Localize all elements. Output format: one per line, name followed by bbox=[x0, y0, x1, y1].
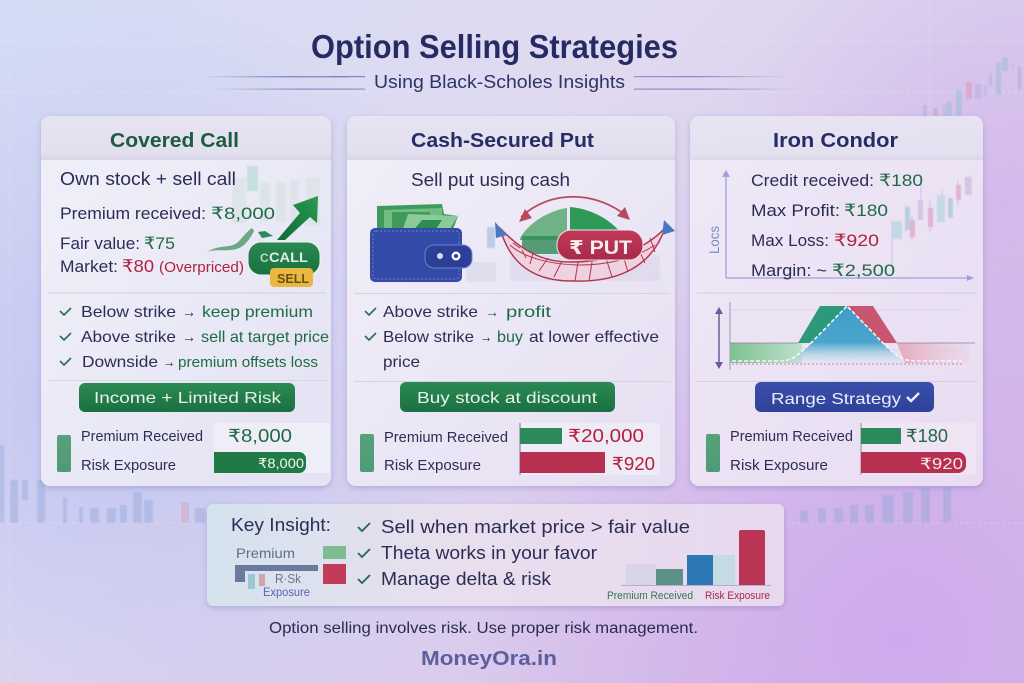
axis with label bbox=[706, 170, 974, 281]
text: fair value: ₹75 bbox=[144, 234, 175, 253]
stats: ₹180 bbox=[844, 201, 888, 220]
text: sell put using cash: Sell put using cash bbox=[411, 170, 570, 190]
icon: green swoosh bbox=[207, 228, 254, 252]
text: premium received: Premium received: bbox=[60, 204, 206, 223]
heading: cash-secured put: Cash-Secured Put bbox=[411, 129, 594, 152]
check list: put: Below strike bbox=[383, 329, 474, 346]
panel: cash-secured put bbox=[347, 116, 675, 486]
mini chart: premium vs risk: ₹180 bbox=[906, 426, 948, 446]
bar chart: premium vs risk bbox=[607, 530, 771, 602]
legend: premium and risk: R·Sk bbox=[275, 572, 302, 586]
check list: covered call: → bbox=[182, 304, 196, 321]
mini chart: premium vs risk: Risk Exposure bbox=[730, 457, 828, 474]
bar chart: premium vs risk: Risk Exposure bbox=[705, 590, 770, 602]
heading: iron condor: Iron Condor bbox=[773, 129, 898, 152]
icon: call badge: C bbox=[260, 251, 269, 265]
heading: covered call: Covered Call bbox=[110, 129, 239, 152]
text: own stock: Own stock + sell call bbox=[60, 168, 236, 189]
icon: up arrow bbox=[277, 196, 318, 240]
mini chart: premium vs risk: Premium Received bbox=[384, 429, 508, 446]
check list: covered call: Below strike bbox=[81, 304, 176, 321]
check list: covered call: Downside bbox=[82, 354, 158, 371]
stats: Credit received: bbox=[751, 171, 874, 190]
panel: covered call bbox=[41, 116, 331, 486]
mini chart: premium vs risk: Premium Received bbox=[730, 428, 853, 445]
check list: insights bbox=[358, 516, 690, 589]
text: market bbox=[60, 256, 244, 276]
check list: covered call: Above strike bbox=[81, 329, 176, 346]
check list: put: Above strike bbox=[383, 304, 478, 321]
axis with label: Locs bbox=[706, 226, 722, 254]
check list: covered call: → bbox=[182, 329, 196, 346]
disclaimer: Option selling involves risk. Use proper risk management. bbox=[269, 620, 698, 637]
mini chart: premium vs risk: Risk Exposure bbox=[384, 457, 481, 474]
mini chart: premium vs risk: ₹20,000 bbox=[568, 426, 644, 446]
legend: premium and risk: Premium bbox=[236, 545, 295, 561]
title: Option Selling Strategies bbox=[311, 28, 678, 65]
check list: put: buy bbox=[497, 329, 523, 346]
icon: call badge bbox=[248, 242, 320, 287]
icon: put payoff graphic: ₹ PUT bbox=[569, 238, 632, 259]
stats: ₹2,500 bbox=[832, 261, 895, 280]
brand: MoneyOra.in bbox=[421, 647, 557, 670]
mini chart: premium vs risk bbox=[360, 423, 660, 475]
check list: covered call: sell at target price bbox=[201, 329, 329, 346]
text: market: Market: bbox=[60, 257, 118, 276]
check list: covered call: premium offsets loss bbox=[178, 355, 318, 371]
check list: insights: Theta works in your favor bbox=[381, 542, 597, 563]
mini chart: premium vs risk: Risk Exposure bbox=[81, 457, 176, 474]
panel: iron condor bbox=[690, 116, 983, 486]
icon: put payoff graphic bbox=[495, 197, 675, 281]
heading: key insight: Key Insight: bbox=[231, 515, 331, 535]
stats bbox=[751, 171, 923, 280]
check list: covered call bbox=[60, 304, 329, 371]
check list: put bbox=[365, 304, 659, 371]
badge: buy stock at discount bbox=[400, 382, 615, 412]
text: premium received bbox=[60, 204, 275, 223]
candlestick chart faded bbox=[892, 175, 971, 268]
mini chart: premium vs risk: ₹920 bbox=[612, 454, 655, 474]
mini chart: premium vs risk: ₹8,000 bbox=[258, 456, 304, 471]
text: fair value: Fair value: bbox=[60, 234, 140, 253]
faded chart behind bbox=[466, 227, 660, 282]
text: market: (Overpriced) bbox=[159, 260, 244, 276]
text: fair value bbox=[60, 234, 175, 253]
check list: put: profit bbox=[506, 304, 552, 321]
check list: insights: Sell when market price > fair value bbox=[381, 516, 690, 537]
icon: small arrow bbox=[258, 231, 273, 238]
badge: buy stock at discount: Buy stock at discount bbox=[417, 390, 598, 407]
panel: key insight bbox=[207, 504, 784, 606]
subtitle with rules: Using Black-Scholes Insights bbox=[374, 71, 625, 92]
check list: put: → bbox=[480, 329, 492, 346]
bar chart: premium vs risk: Premium Received bbox=[607, 590, 693, 602]
legend: premium and risk: Exposure bbox=[263, 587, 310, 599]
legend: premium and risk bbox=[235, 545, 346, 599]
text: premium received: ₹8,000 bbox=[211, 204, 275, 223]
check list: put: price bbox=[383, 354, 420, 371]
stats: Max Loss: bbox=[751, 231, 829, 250]
text: market: ₹80 bbox=[122, 256, 154, 276]
mini chart: premium vs risk: Premium Received bbox=[81, 428, 203, 445]
check list: put: → bbox=[485, 304, 499, 321]
stats: ₹920 bbox=[834, 231, 879, 250]
payoff chart: iron condor bbox=[715, 302, 975, 370]
check list: covered call: keep premium bbox=[202, 304, 313, 321]
badge: range strategy: Range Strategy bbox=[771, 391, 901, 408]
mini chart: premium vs risk: ₹920 bbox=[920, 456, 963, 473]
check list: covered call: → bbox=[163, 354, 175, 371]
icon: wallet bbox=[370, 204, 472, 282]
mini chart: premium vs risk bbox=[706, 423, 976, 475]
badge: income + limited risk bbox=[79, 383, 295, 412]
icon: call badge: CALL bbox=[269, 250, 308, 265]
badge: range strategy bbox=[755, 382, 934, 412]
mini chart: premium vs risk bbox=[57, 423, 330, 474]
badge: income + limited risk: Income + Limited Risk bbox=[94, 390, 282, 407]
mini chart: premium vs risk: ₹8,000 bbox=[228, 426, 292, 446]
check list: put: at lower effective bbox=[529, 329, 659, 346]
stats: Max Profit: bbox=[751, 201, 840, 220]
faded bars behind arrow bbox=[232, 166, 320, 226]
check list: insights: Manage delta & risk bbox=[381, 568, 552, 589]
stats: ₹180 bbox=[879, 171, 923, 190]
icon: call badge: SELL bbox=[277, 271, 309, 286]
stats: Margin: ~ bbox=[751, 261, 827, 280]
